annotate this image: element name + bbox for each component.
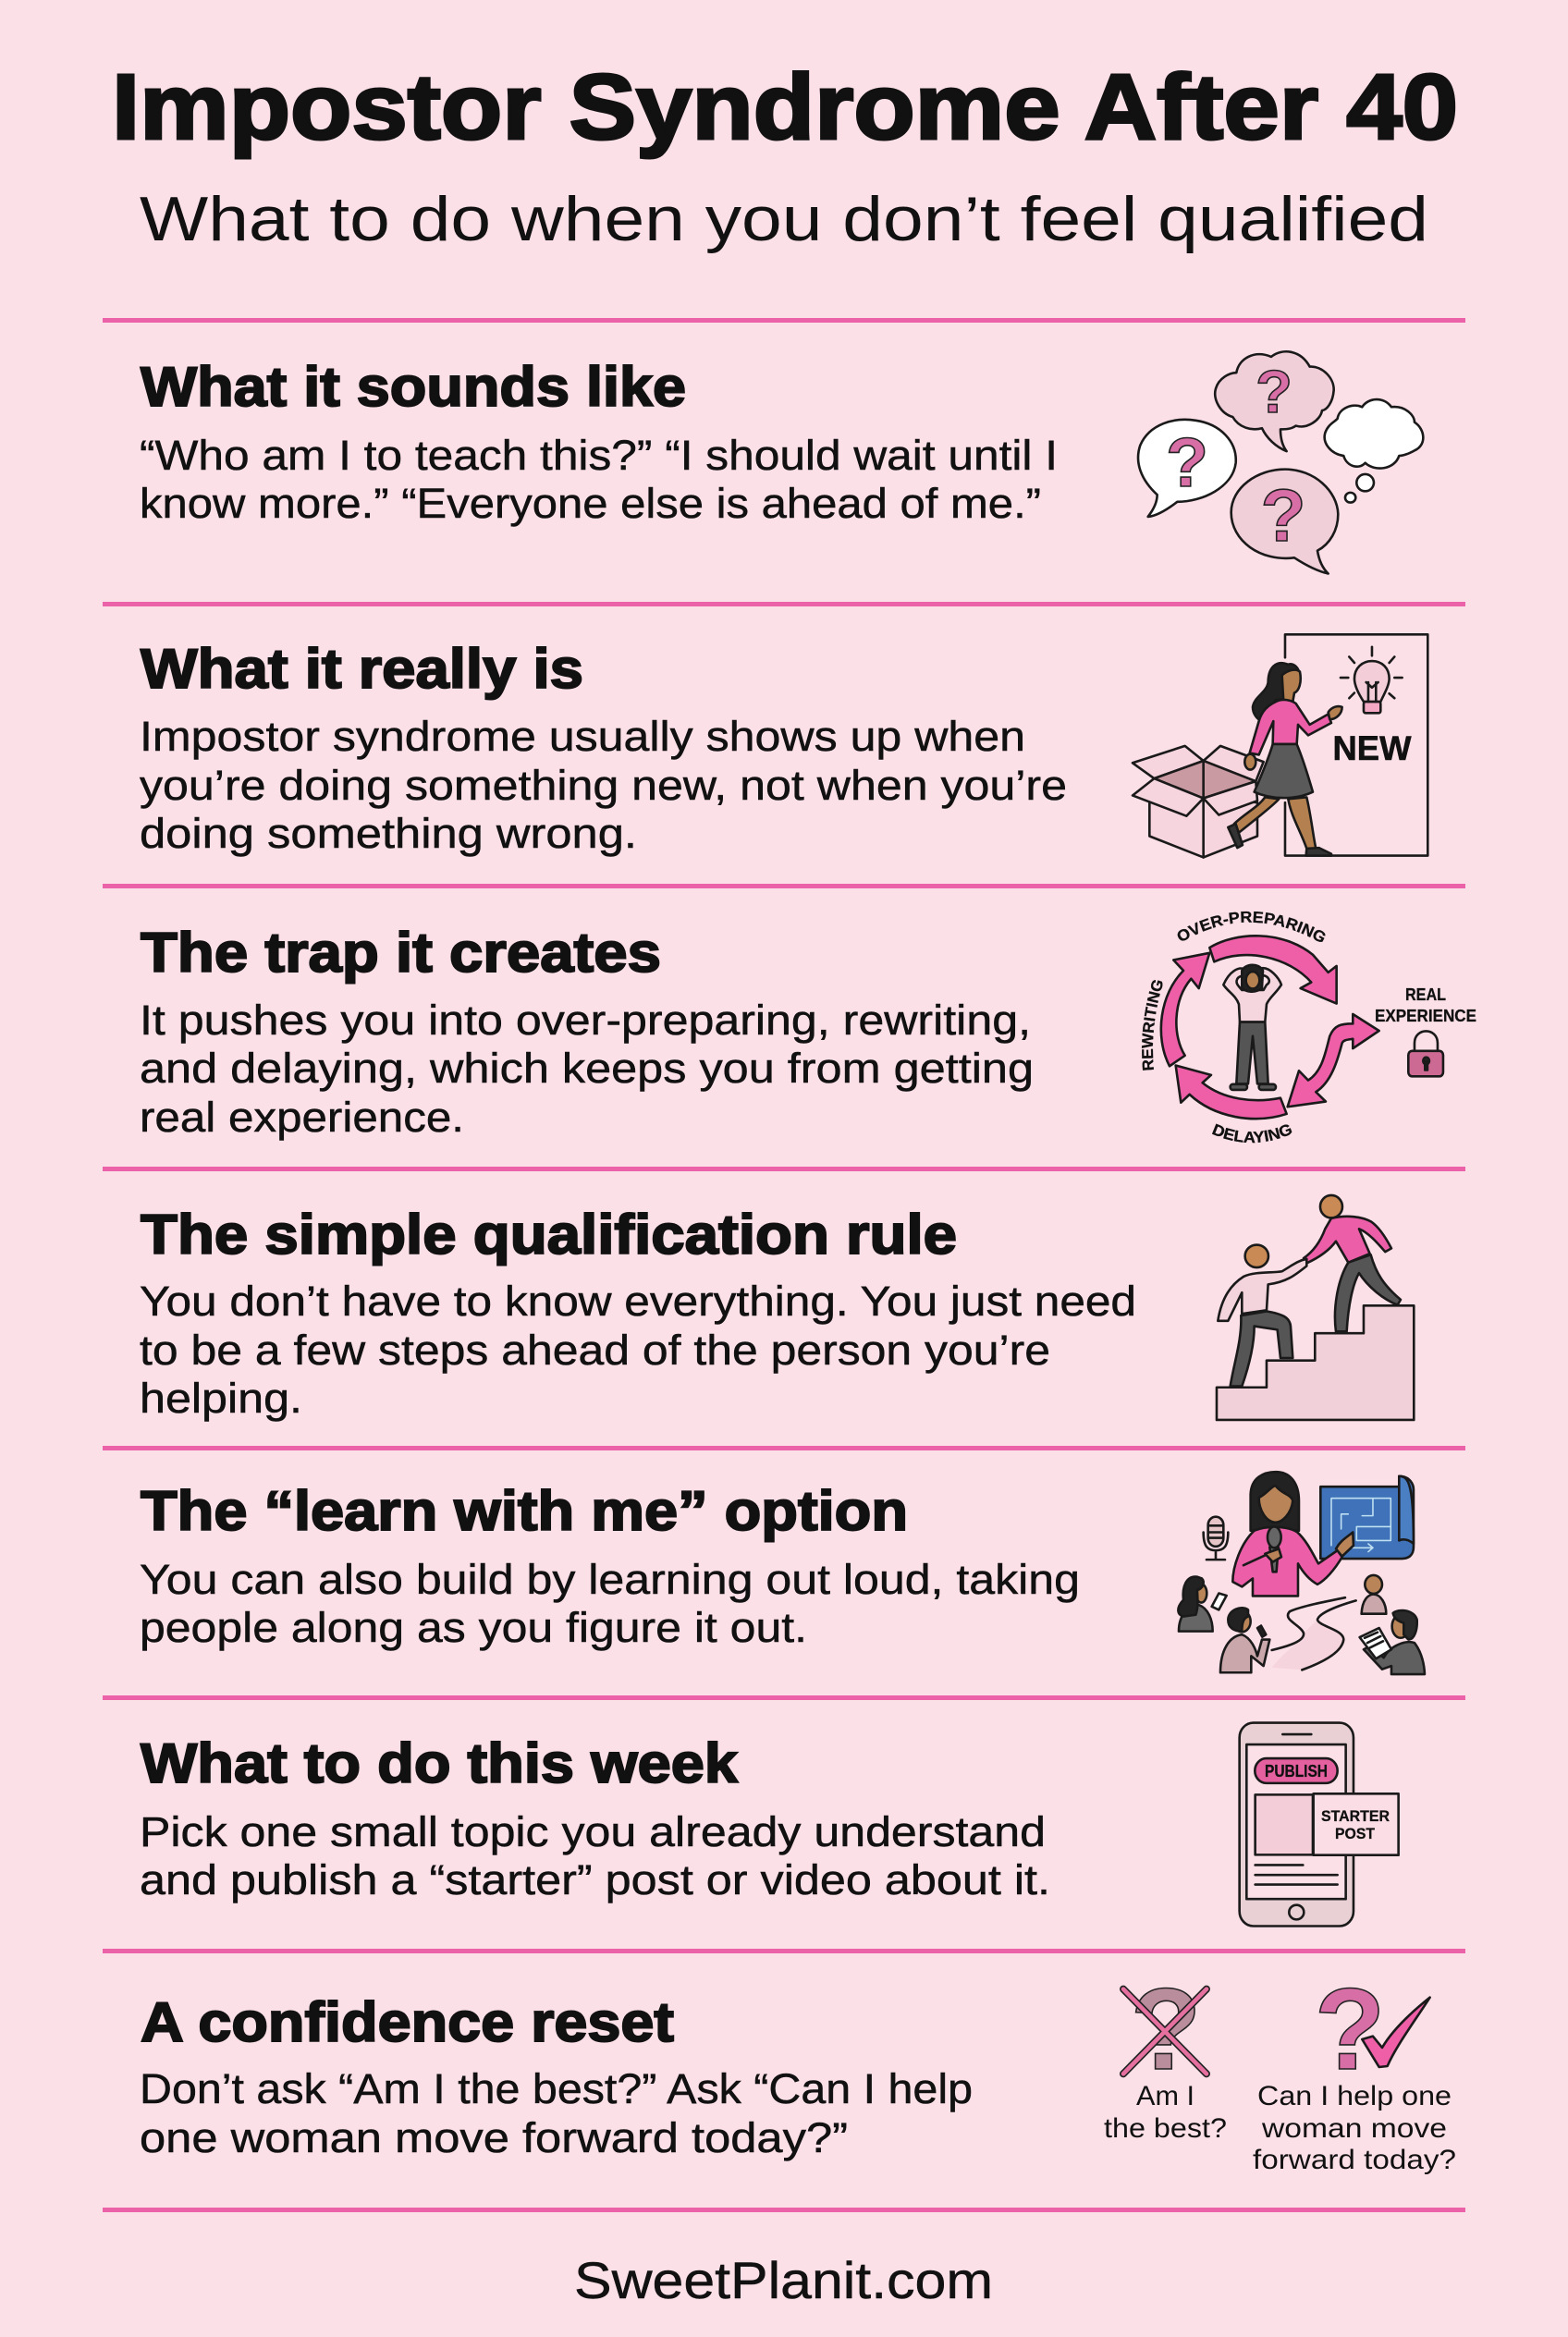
heading: The trap it creates — [141, 922, 661, 984]
subtitle: What to do when you don’t feel qualified — [140, 184, 1428, 254]
body text — [140, 432, 1058, 527]
stressed person — [1223, 965, 1281, 1090]
label: real experience: REAL — [1405, 985, 1446, 1004]
body text — [140, 997, 1034, 1141]
body text: you’re doing something new, not when you’re — [140, 762, 1067, 809]
caption: am I the best — [1104, 2081, 1227, 2144]
body text — [140, 1808, 1050, 1903]
title: Impostor Syndrome After 40 — [112, 55, 1458, 159]
body text: You can also build by learning out loud, taking — [140, 1556, 1080, 1603]
body text: You don’t have to know everything. You just need — [140, 1278, 1136, 1325]
body text: helping. — [140, 1375, 302, 1422]
icon: phone with starter post — [1240, 1723, 1399, 1927]
caption: can I help one woman: Can I help one — [1257, 2081, 1452, 2111]
icon: phone with starter post: POST — [1335, 1825, 1376, 1842]
audience — [1178, 1575, 1425, 1674]
body text: Impostor syndrome usually shows up when — [140, 713, 1025, 760]
caption: am I the best: the best? — [1104, 2113, 1227, 2144]
body text — [140, 713, 1067, 857]
icon: phone with starter post: PUBLISH — [1265, 1762, 1328, 1780]
body text: Don’t ask “Am I the best?” Ask “Can I help — [140, 2065, 973, 2112]
body text: It pushes you into over-preparing, rewriting, — [140, 997, 1031, 1044]
footer: SweetPlanit.com — [574, 2251, 993, 2309]
caption: am I the best: Am I — [1136, 2081, 1194, 2111]
icon: question speech bubbles: ? — [1166, 423, 1208, 501]
panel: learn with me — [140, 1472, 1425, 1674]
lock — [1408, 1031, 1443, 1076]
label: real experience — [1375, 985, 1476, 1025]
icon: question with check mark — [1315, 1965, 1430, 2094]
icon: question with check mark: ? — [1315, 1965, 1385, 2094]
body text: “Who am I to teach this?” “I should wait until I — [140, 432, 1058, 479]
icon: woman stepping from box to new door — [1133, 634, 1427, 857]
body text: know more.” “Everyone else is ahead of me.” — [140, 480, 1041, 527]
icon: presenter with audience, blueprint and path — [1178, 1472, 1425, 1674]
label: real experience: EXPERIENCE — [1375, 1006, 1476, 1025]
heading: What it sounds like — [141, 356, 686, 418]
icon: cycle of arrows around stressed person — [1141, 912, 1476, 1143]
body text: real experience. — [140, 1094, 464, 1141]
icon: question speech bubbles: ? — [1261, 474, 1305, 557]
heading: What to do this week — [141, 1732, 739, 1794]
light bulb — [1341, 647, 1403, 713]
body text — [140, 2065, 973, 2161]
body text: doing something wrong. — [140, 810, 637, 857]
body text: and publish a “starter” post or video about it. — [140, 1856, 1050, 1903]
icon: helping hand on stairs — [1217, 1195, 1414, 1420]
body text — [140, 1556, 1080, 1651]
woman — [1228, 663, 1342, 856]
icon: cycle of arrows around stressed person: REWRITING — [1141, 980, 1163, 1071]
caption: can I help one woman: forward today? — [1253, 2145, 1456, 2175]
microphone — [1204, 1517, 1228, 1560]
panel: the simple qualification rule — [140, 1195, 1414, 1422]
caption: can I help one woman: woman move — [1261, 2113, 1447, 2144]
presenter — [1232, 1472, 1354, 1596]
panel: a confidence reset — [140, 1965, 1456, 2175]
box — [1133, 746, 1264, 857]
body text: one woman move forward today?” — [140, 2114, 848, 2161]
body text: Pick one small topic you already understand — [140, 1808, 1046, 1855]
heading: The “learn with me” option — [141, 1480, 908, 1542]
body text: people along as you figure it out. — [140, 1604, 807, 1651]
body text — [140, 1278, 1136, 1422]
heading: What it really is — [141, 638, 583, 700]
panel: the trap it creates — [140, 912, 1476, 1143]
blueprint — [1320, 1476, 1414, 1559]
winding path — [1272, 1597, 1356, 1670]
body text: and delaying, which keeps you from getting — [140, 1045, 1034, 1092]
icon: woman stepping from box to new door: NEW — [1333, 729, 1412, 767]
heading: The simple qualification rule — [141, 1204, 957, 1266]
heading: A confidence reset — [141, 1991, 674, 2053]
icon: crossed-out question: ? — [1131, 1965, 1201, 2094]
icon: question speech bubbles — [1138, 351, 1423, 574]
panel: what it sounds like — [140, 351, 1423, 574]
caption: can I help one woman — [1253, 2081, 1456, 2175]
icon: cycle of arrows around stressed person: OVER-PREPARING — [1178, 912, 1326, 942]
panel: what it really is — [140, 634, 1427, 857]
panel: what to do this week — [140, 1723, 1399, 1927]
icon: phone with starter post: STARTER — [1321, 1807, 1390, 1825]
body text: to be a few steps ahead of the person you’re — [140, 1327, 1050, 1374]
icon: cycle of arrows around stressed person: DELAYING — [1212, 1124, 1292, 1143]
icon: question speech bubbles: ? — [1256, 358, 1292, 425]
